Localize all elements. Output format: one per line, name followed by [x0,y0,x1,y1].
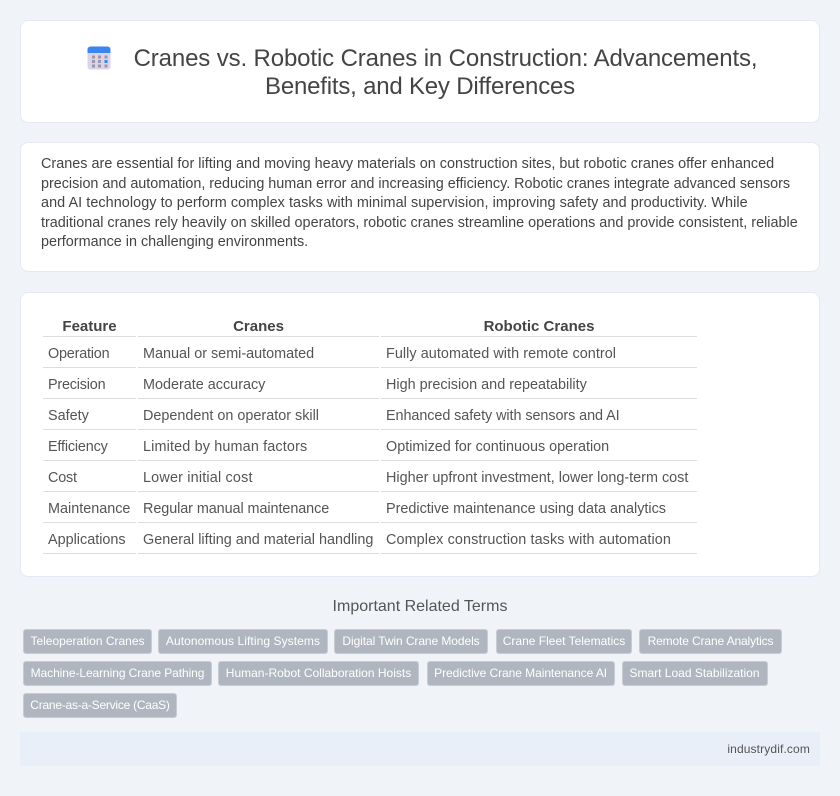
tag list: related terms: Human-Robot Collaboration Hoists [226,666,411,680]
tag list: related terms: Autonomous Lifting Systems [166,634,320,648]
tag list: related terms: Remote Crane Analytics [648,634,773,648]
text block: introduction: Cranes are essential for lifting and moving heavy materials on construction sites, but robotic cranes offer enhanced [41,156,774,172]
table: cranes comparison: Efficiency [48,439,108,455]
tag list: related terms: Crane-as-a-Service (CaaS) [30,698,170,712]
panel: comparison table [20,292,820,577]
table: cranes comparison: Applications [48,532,126,548]
tag list: related terms: Crane Fleet Telematics [503,634,625,648]
text block: introduction: performance in challenging environments. [41,234,308,250]
table: cranes comparison: Maintenance [48,501,130,517]
heading: related terms: Important Related Terms [333,598,507,615]
table: cranes comparison: Moderate accuracy [143,377,265,393]
text block: introduction: precision and automation, reducing human error and increasing efficiency. Robotic cranes integrate advanced sensors [41,176,790,192]
text block: introduction [41,156,798,250]
table: cranes comparison: Lower initial cost [143,470,253,486]
footer bar [20,732,820,766]
table: cranes comparison: Regular manual maintenance [143,501,329,517]
footer source text: industrydif.com [727,742,810,756]
table: cranes comparison: High precision and repeatability [386,377,587,393]
table: cranes comparison: Limited by human factors [143,439,307,455]
tag list: related terms: Teleoperation Cranes [30,634,145,648]
table: cranes comparison: Operation [48,346,109,362]
text block: introduction: traditional cranes rely heavily on skilled operators, robotic cranes streamline operations and provide consistent, reliable [41,214,798,230]
table: cranes comparison: General lifting and material handling [143,532,373,548]
table: cranes comparison: Enhanced safety with sensors and AI [386,408,620,424]
title [134,45,757,100]
table: cranes comparison: Manual or semi-automated [143,346,314,362]
tag list: related terms: Smart Load Stabilization [629,666,760,680]
table: cranes comparison: Cost [48,470,77,486]
title: Benefits, and Key Differences [265,73,575,100]
table: cranes comparison: Higher upfront investment, lower long-term cost [386,470,688,486]
panel: header card [20,20,820,123]
icon: calendar grid [88,46,110,70]
table: cranes comparison: Fully automated with remote control [386,346,616,362]
table: cranes comparison: Safety [48,408,89,424]
table: cranes comparison: Dependent on operator skill [143,408,319,424]
table: cranes comparison: Precision [48,377,105,393]
table: cranes comparison: Feature [62,318,117,335]
title: Cranes vs. Robotic Cranes in Construction: Advancements, [134,45,757,72]
tag list: related terms: Predictive Crane Maintenance AI [434,666,607,680]
tag list: related terms: Digital Twin Crane Models [342,634,480,648]
text block: introduction: and AI technology to perform complex tasks with minimal supervision, improving safety and productivity. While [41,195,748,211]
table: cranes comparison: Cranes [233,318,284,335]
table: cranes comparison: Complex construction tasks with automation [386,532,671,548]
panel: introduction [20,142,820,272]
table: cranes comparison: Robotic Cranes [484,318,594,335]
table: cranes comparison [43,318,697,554]
table: cranes comparison: Predictive maintenance using data analytics [386,501,666,517]
tag list: related terms: Machine-Learning Crane Pathing [31,666,204,680]
tag list: related terms [23,629,782,718]
table: cranes comparison: Optimized for continuous operation [386,439,609,455]
